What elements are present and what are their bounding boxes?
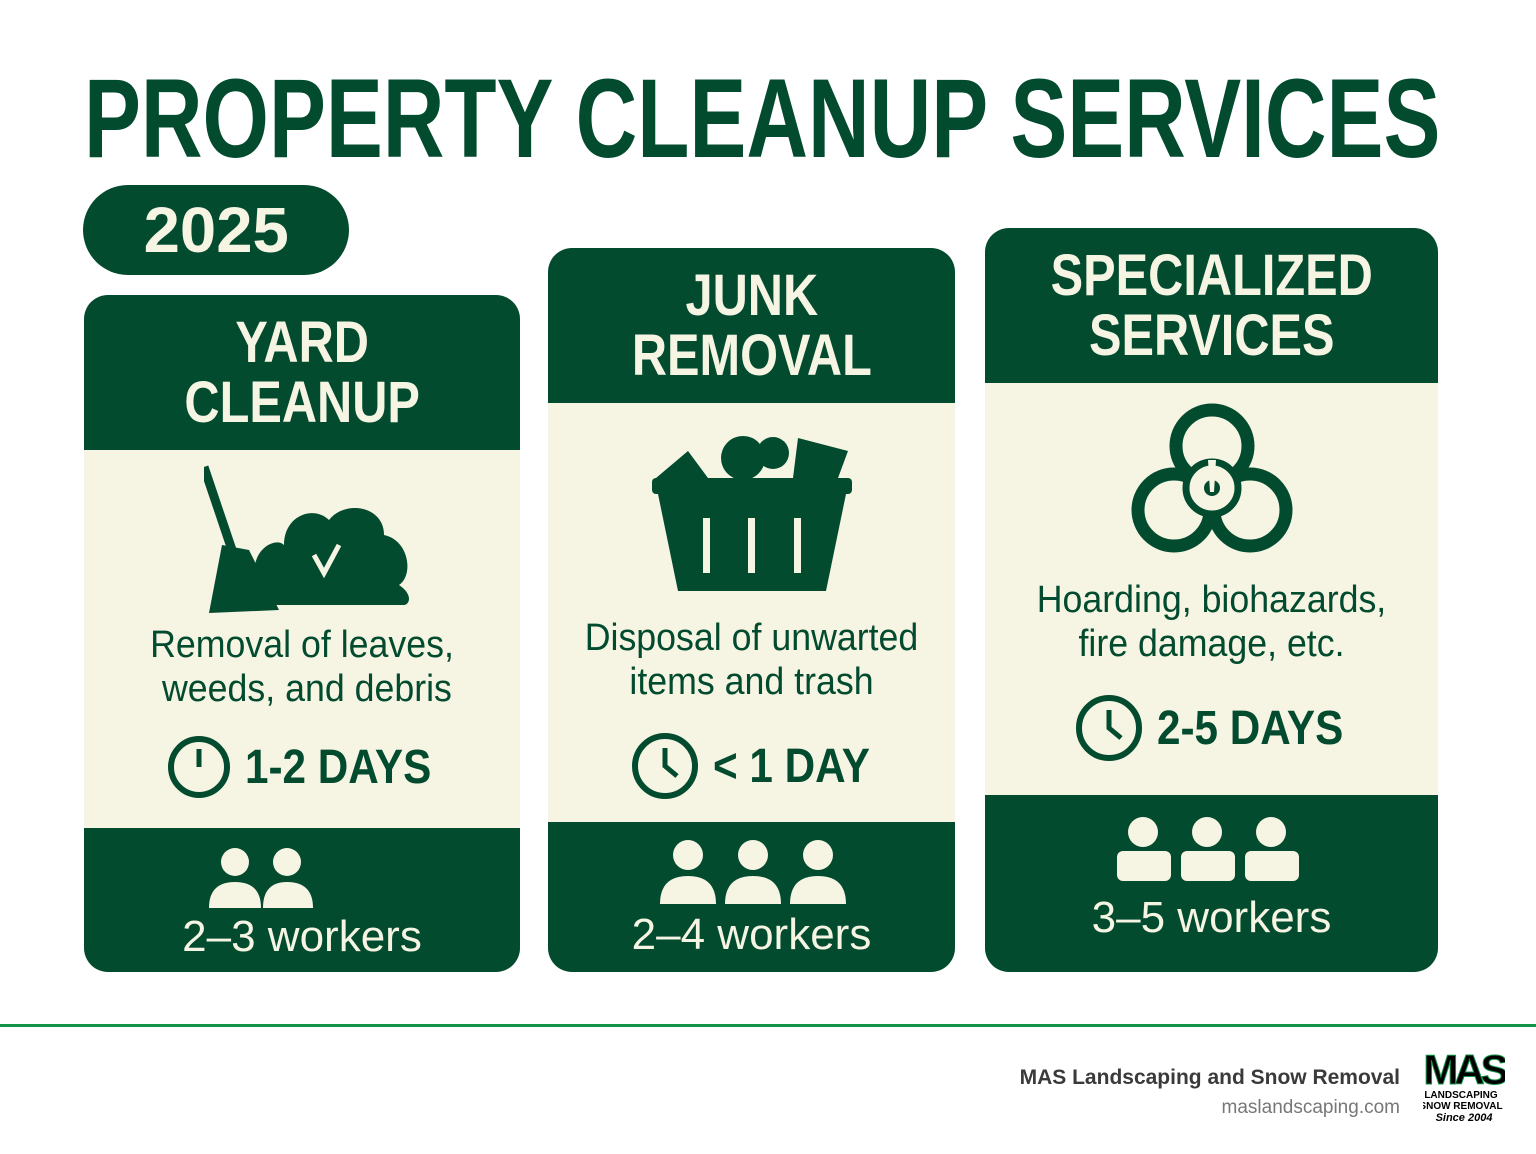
icon: two people [209,848,313,908]
text: junk description [585,617,918,703]
heading: junk removal: REMOVAL [631,322,871,388]
footer: 3-5 workers: 3–5 workers [1092,893,1331,942]
text: junk description: Disposal of unwarted [585,617,918,659]
text: yard description: weeds, and debris [162,668,452,710]
heading: yard cleanup: YARD [235,310,369,374]
logo: LANDSCAPING [1424,1090,1498,1101]
icon: three people [1117,817,1299,881]
footer: 2-4 workers [548,822,955,972]
text: specialized description: fire damage, etc. [1078,623,1345,665]
duration: less than 1 day: < 1 DAY [713,740,870,792]
heading: specialized services: SPECIALIZED [1050,242,1373,308]
footer: 2-3 workers [84,828,520,972]
panel: specialized services [985,228,1438,972]
duration: 2-5 days [1076,695,1343,761]
footer text: maslandscaping.com [1222,1097,1400,1118]
heading: junk removal [548,248,955,403]
footer: 3-5 workers [985,795,1438,972]
text: specialized description [1037,579,1386,665]
icon: rake and bush [204,466,409,613]
text: specialized description: Hoarding, biohazards, [1037,579,1386,621]
text: yard description: Removal of leaves, [150,624,454,666]
year badge: 2025 [143,194,289,266]
panel: yard cleanup [84,295,520,972]
text: junk description: items and trash [629,661,874,703]
icon: three people [660,840,846,904]
duration: 2-5 days: 2-5 DAYS [1157,702,1343,754]
logo: Since 2004 [1436,1112,1492,1124]
icon: biohazard [1132,404,1292,552]
duration: 1-2 days [168,736,431,798]
heading: specialized services: SERVICES [1089,302,1334,368]
heading: specialized services [985,228,1438,383]
duration: less than 1 day [632,733,870,799]
icon: junk basket [652,436,852,591]
text: yard description [150,624,454,710]
heading: yard cleanup [84,295,520,450]
duration: 1-2 days: 1-2 DAYS [245,740,431,794]
footer: 2-4 workers: 2–4 workers [632,910,871,959]
logo [1423,1050,1505,1124]
heading: yard cleanup: CLEANUP [184,370,420,434]
divider [0,1024,1536,1027]
footer: 2-3 workers: 2–3 workers [182,912,422,961]
heading: junk removal: JUNK [685,262,818,328]
footer text: MAS Landscaping and Snow Removal [1020,1066,1400,1089]
panel: junk removal [548,248,955,972]
footer text [1020,1066,1400,1118]
title: PROPERTY CLEANUP SERVICES [84,56,1440,181]
year badge [83,185,349,275]
